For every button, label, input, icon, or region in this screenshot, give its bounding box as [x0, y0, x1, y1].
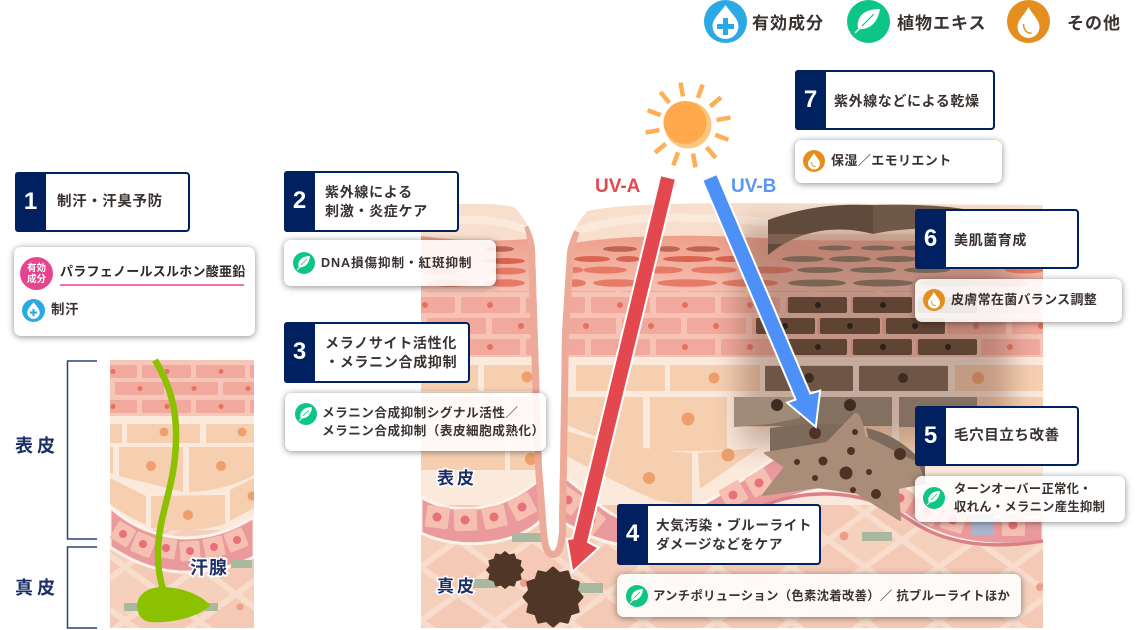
- panel 1 heading: 1: [24, 188, 37, 215]
- panel 6 heading: 6: [924, 225, 937, 252]
- panel 2 card: [284, 240, 496, 286]
- panel 7 heading: [795, 70, 995, 130]
- panel 7 heading: 7: [804, 86, 817, 113]
- ingredient text: アンチポリューション（色素沈着改善）／ 抗ブルーライトほか: [653, 589, 1010, 603]
- panel 5 heading: [915, 406, 1079, 466]
- panel 1 heading: [15, 172, 190, 232]
- panel 6 heading: 美肌菌育成: [954, 232, 1027, 248]
- legend icon: active ingredient: [704, 0, 747, 43]
- panel 7 card: [795, 140, 1002, 183]
- ingredient text: メラニン合成抑制（表皮細胞成熟化）: [322, 424, 545, 438]
- icon: plant extract: [295, 403, 317, 425]
- dark damage zone: [734, 205, 1018, 480]
- panel 3 heading: 3: [293, 338, 306, 365]
- badge: active ingredient: 有効: [27, 262, 46, 274]
- ingredient text: メラニン合成抑制シグナル活性／: [322, 406, 518, 420]
- ingredient text: [954, 482, 1105, 514]
- panel 4 heading: 大気汚染・ブルーライト: [656, 518, 812, 533]
- ingredient text: ターンオーバー正常化・: [954, 482, 1092, 496]
- legend label: active ingredient: 有効成分: [752, 14, 824, 33]
- arrow: UV-A: [568, 176, 675, 570]
- panel 3 heading: メラノサイト活性化: [325, 335, 457, 351]
- panel 7 heading: 紫外線などによる乾燥: [834, 93, 980, 109]
- legend icon: plant extract: [847, 0, 890, 43]
- hair follicle wall: [531, 225, 573, 551]
- underline: [60, 284, 244, 286]
- melanin blob small: [487, 552, 523, 588]
- ingredient text: 収れん・メラニン産生抑制: [954, 500, 1105, 514]
- panel: sweat gland skin cross-section: [109, 360, 256, 628]
- panel 1 card: [14, 247, 255, 336]
- icon: sun: [646, 83, 730, 167]
- ingredient name: パラフェノールスルホン酸亜鉛: [60, 264, 246, 279]
- panel 4 heading: ダメージなどをケア: [656, 537, 783, 552]
- icon: sweat duct and gland: [137, 360, 210, 622]
- legend label: other: その他: [1067, 14, 1121, 33]
- ingredient text: [322, 406, 545, 438]
- star-shaped melanocyte: [763, 414, 925, 520]
- label: UV-B: UV-B: [731, 176, 776, 197]
- panel 4 card: [617, 574, 1021, 617]
- ingredient text: 皮膚常在菌バランス調整: [951, 292, 1097, 307]
- panel 6 card: [915, 279, 1122, 322]
- panel 3 card: [285, 393, 546, 451]
- panel 5 card: [915, 476, 1125, 522]
- icon: active ingredient: [22, 299, 45, 322]
- badge: active ingredient: 成分: [27, 274, 46, 284]
- label: dermis main: 真皮: [437, 576, 477, 596]
- melanin blob large: [524, 568, 582, 626]
- arrow: UV-B: [704, 175, 819, 425]
- ingredient text: DNA損傷抑制・紅斑抑制: [321, 256, 472, 270]
- bracket: epidermis: [68, 361, 97, 539]
- panel 3 heading: [284, 322, 470, 383]
- panel 6 heading: [915, 209, 1079, 269]
- panel 2 heading: 紫外線による: [325, 184, 413, 200]
- ingredient text: 保湿／エモリエント: [831, 153, 952, 168]
- effect text: 制汗: [51, 302, 79, 317]
- icon: other: [923, 289, 945, 311]
- icon: plant extract: [626, 585, 648, 607]
- label: sweat gland: 汗腺: [190, 558, 228, 578]
- badge: active ingredient: [20, 257, 53, 290]
- panel 2 heading: 刺激・炎症ケア: [325, 203, 428, 219]
- label: dermis left: 真皮: [15, 578, 59, 598]
- panel 4 heading: [617, 504, 821, 565]
- panel 4 heading: 4: [626, 520, 639, 547]
- panel 1 heading: 制汗・汗臭予防: [57, 194, 163, 210]
- panel: main skin cross-section: [421, 200, 1045, 630]
- panel 5 heading: 毛穴目立ち改善: [954, 428, 1060, 444]
- legend icon: other: [1007, 0, 1050, 43]
- legend label: plant extract: 植物エキス: [897, 14, 986, 33]
- icon: plant extract: [923, 487, 945, 509]
- label: epidermis main: 表皮: [437, 468, 477, 488]
- label: epidermis left: 表皮: [15, 436, 59, 456]
- label: UV-A: UV-A: [595, 176, 641, 197]
- panel 2 heading: [284, 171, 459, 232]
- panel 2 heading: 2: [293, 187, 306, 214]
- panel 3 heading: ・メラニン合成抑制: [325, 354, 457, 370]
- bracket: dermis: [68, 547, 97, 628]
- icon: plant extract: [293, 252, 315, 274]
- icon: other: [803, 150, 825, 172]
- panel 5 heading: 5: [924, 422, 937, 449]
